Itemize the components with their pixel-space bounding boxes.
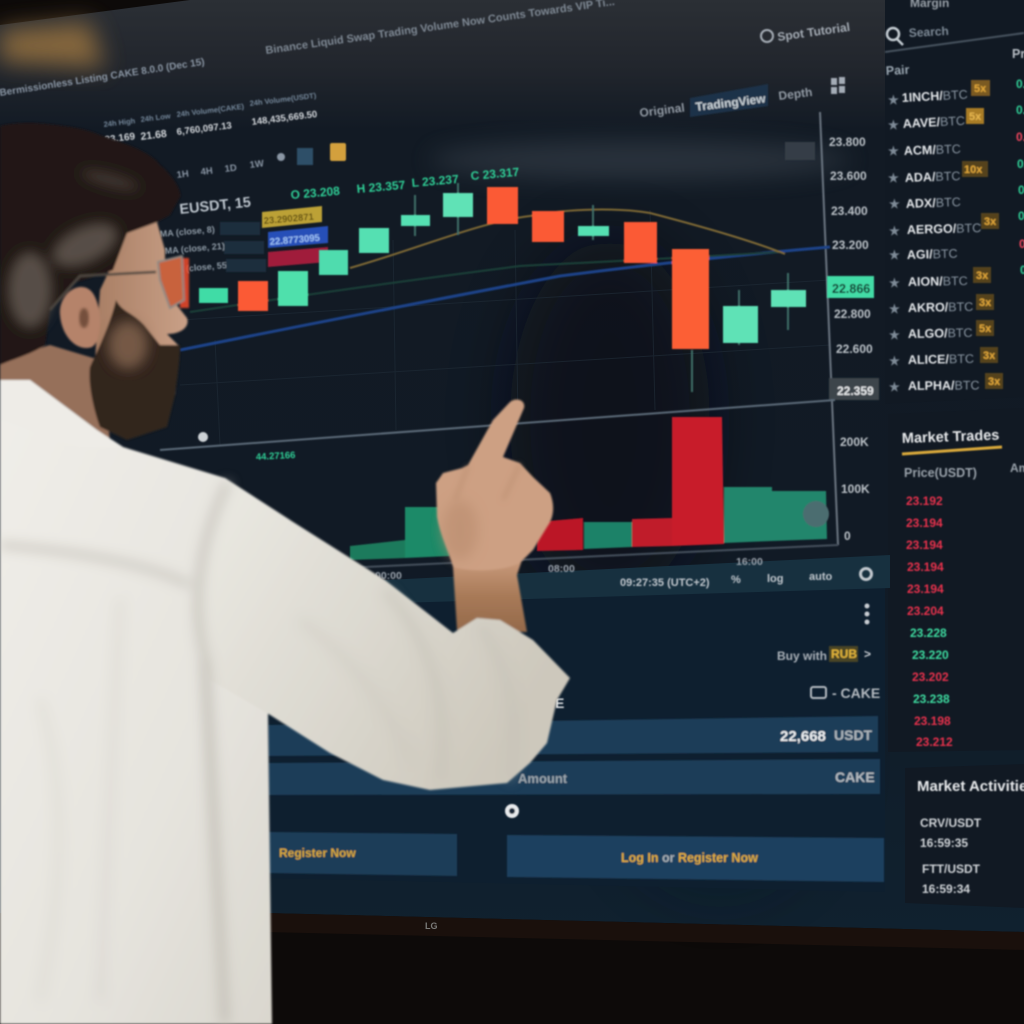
price axis: 200K <box>840 435 869 449</box>
slider handle <box>505 804 519 818</box>
trading pair list: AAVE/BTC <box>902 114 965 131</box>
star markers: ★ <box>889 197 900 211</box>
price axis: 23.800 <box>829 135 866 149</box>
right column panel: pairs <box>885 0 1024 404</box>
trading pair list: 3x <box>983 350 996 362</box>
price axis: 22.800 <box>834 307 871 321</box>
price axis: 100K <box>841 482 870 496</box>
indicator labels and OHLC readout: 23.2902871 <box>263 212 315 227</box>
buy button login: Register Now <box>279 846 356 860</box>
trading pair list: ALPHA/BTC <box>908 378 980 393</box>
trading pair list: AION/BTC <box>908 274 968 289</box>
market trades: 23.238 <box>913 692 950 706</box>
trading pair list: 3x <box>976 270 989 282</box>
market trades: 23.204 <box>907 604 944 618</box>
buy with RUB: > <box>864 647 871 661</box>
hair <box>0 123 180 365</box>
screen reflections <box>0 22 850 890</box>
24h statistics header: 21.68 <box>140 128 168 143</box>
24h statistics header: 24h Low <box>140 111 171 124</box>
timeframe row: 1D <box>224 163 238 175</box>
search box <box>885 0 1024 52</box>
buy with RUB: RUB <box>831 647 857 661</box>
order panel <box>265 578 885 892</box>
trading pair list: ADX/BTC <box>906 195 961 211</box>
chart toolbar strip <box>265 555 890 607</box>
order form <box>268 604 884 882</box>
price axis: 23.400 <box>831 204 868 218</box>
candlestick chart <box>160 183 874 450</box>
ear <box>60 287 100 348</box>
star markers: ★ <box>888 93 899 107</box>
monitor bezel <box>265 913 1024 950</box>
amount input <box>268 759 880 795</box>
trading pair list: 1INCH/BTC <box>901 88 968 105</box>
chart view tabs: Depth <box>778 85 813 103</box>
star markers: ★ <box>889 302 900 316</box>
right column panel: market trades <box>888 408 1024 752</box>
indicator labels and OHLC readout: MA (close, 21) <box>164 241 225 256</box>
market activities: 16:59:34 <box>922 882 970 896</box>
timeframe row: 1H <box>176 169 190 181</box>
form label letter: E <box>555 695 564 711</box>
time axis and toolbar <box>150 545 872 589</box>
market trades: 23.194 <box>907 560 944 574</box>
trading pair list: 3x <box>979 297 992 309</box>
trading pair list: 5x <box>969 111 982 123</box>
market trades: 23.228 <box>910 626 947 640</box>
glasses <box>50 256 189 310</box>
candles <box>199 187 874 349</box>
beard <box>89 300 180 440</box>
star markers: ★ <box>889 224 900 238</box>
star markers: ★ <box>889 354 900 368</box>
price axis: 22.600 <box>836 342 873 356</box>
market trades: 23.192 <box>906 494 943 508</box>
star markers: ★ <box>889 380 900 394</box>
time axis and toolbar: 08:00 <box>548 563 575 575</box>
price input: USDT <box>834 727 873 743</box>
indicator labels and OHLC readout: MA (close, 8) <box>159 224 215 239</box>
trading pair list: AERGO/BTC <box>907 221 981 237</box>
market trades: Market Trades <box>902 428 1000 447</box>
24h statistics header <box>103 91 318 146</box>
star markers: ★ <box>889 248 900 262</box>
trading pair list: ALGO/BTC <box>908 326 973 341</box>
star markers: ★ <box>889 328 900 342</box>
trading pair list: 10x <box>964 164 983 176</box>
trading pair list: ADA/BTC <box>905 169 961 185</box>
time axis and toolbar: log <box>767 573 784 585</box>
price axis <box>785 112 879 545</box>
trading pair list: ALICE/BTC <box>908 352 974 367</box>
CAKE label <box>811 685 880 701</box>
trading pair list <box>885 47 1024 394</box>
star markers: ★ <box>888 118 899 132</box>
volume bars <box>198 417 829 560</box>
hair highlights <box>8 165 141 328</box>
amount input: Amount <box>518 771 568 786</box>
green candle wicks <box>415 183 788 392</box>
price axis: 0 <box>844 529 851 543</box>
indicator labels and OHLC readout <box>159 165 520 275</box>
market activities: CRV/USDT <box>920 816 982 830</box>
24h statistics header: 148,435,669.50 <box>251 109 318 128</box>
market activities: 16:59:35 <box>920 836 968 850</box>
trading pair list: AKRO/BTC <box>908 300 973 315</box>
price axis: 23.200 <box>832 238 869 252</box>
star markers: ★ <box>889 276 900 290</box>
top notice text: Bermissionless Listing CAKE 8.0.0 (Dec 15) <box>0 57 205 99</box>
sell button login: Log In or Register Now <box>621 851 758 865</box>
trading pair list: Pair <box>885 63 910 78</box>
forearm and hand <box>436 400 553 632</box>
shirt sleeve <box>190 478 570 790</box>
time axis and toolbar: auto <box>809 571 832 583</box>
trading pair list: 5x <box>979 323 992 335</box>
time axis and toolbar: % <box>731 574 741 586</box>
indicator labels and OHLC readout: L 23.237 <box>411 172 460 190</box>
beard highlights <box>108 321 148 369</box>
time axis and toolbar: 09:27:35 (UTC+2) <box>620 577 710 589</box>
buy button login <box>268 832 457 876</box>
candlestick chart: 22.866 <box>832 282 870 296</box>
timeframe row <box>176 143 346 181</box>
market trades: 23.202 <box>912 670 949 684</box>
trading pair list: ACM/BTC <box>904 142 961 158</box>
24h statistics header: 24h Volume(CAKE) <box>176 102 245 119</box>
market activities: FTT/USDT <box>922 862 981 876</box>
market trades: 23.198 <box>914 714 951 728</box>
price input <box>268 716 878 756</box>
layout icon <box>831 77 845 94</box>
indicator labels and OHLC readout: EUSDT, 15 <box>179 195 252 218</box>
24h statistics header: 6,760,097.13 <box>176 120 232 138</box>
indicator labels and OHLC readout: O 23.208 <box>290 184 341 202</box>
market trades <box>902 428 1024 749</box>
right column panel: market activities <box>905 764 1024 908</box>
indicator labels and OHLC readout: MA (close, 55) <box>169 260 230 275</box>
moving average lines <box>160 210 835 450</box>
indicator labels and OHLC readout: C 23.317 <box>470 165 520 183</box>
market trades: Price(USDT) <box>904 466 977 480</box>
time axis and toolbar: 00:00 <box>375 570 402 582</box>
chart grid <box>180 210 830 445</box>
star markers: ★ <box>888 144 899 158</box>
shirt torso <box>0 380 300 1024</box>
chart view tabs: Original <box>639 101 685 120</box>
amount input: CAKE <box>835 769 875 785</box>
volume bars: 44.27166 <box>256 450 296 463</box>
timeframe row: 4H <box>200 166 214 178</box>
trading pair list: 3x <box>988 376 1001 388</box>
star markers: ★ <box>888 171 899 185</box>
buy with RUB <box>777 646 871 663</box>
market trades: 23.194 <box>906 516 943 530</box>
top notice text <box>0 0 851 99</box>
man <box>0 123 570 1024</box>
indicator labels and OHLC readout: H 23.357 <box>356 178 406 196</box>
menu dots <box>864 604 870 624</box>
top notice text: Spot Tutorial <box>776 20 851 44</box>
CAKE label: - CAKE <box>832 685 880 701</box>
shirt folds <box>0 482 514 1024</box>
neck <box>0 345 110 440</box>
price column fragments <box>1016 77 1024 277</box>
price axis: 22.359 <box>837 384 874 398</box>
trading pair list: 3x <box>984 216 997 228</box>
indicator labels and OHLC readout: 22.8773095 <box>269 233 321 248</box>
search box: Search <box>908 24 949 40</box>
chart view tabs: TradingView <box>695 91 767 114</box>
24h statistics header: 24h High <box>103 116 136 129</box>
market trades: 23.220 <box>912 648 949 662</box>
time axis and toolbar: 16:00 <box>736 556 763 568</box>
chart view tabs <box>639 77 845 120</box>
collar <box>0 380 123 447</box>
market trades: 23.212 <box>916 735 953 749</box>
price input: 22,668 <box>780 728 826 745</box>
buy with RUB: Buy with <box>777 649 827 663</box>
timeframe row: 1W <box>249 158 265 171</box>
trading pair list: AGI/BTC <box>907 247 958 262</box>
star markers <box>888 93 900 394</box>
price axis: 23.600 <box>830 169 867 183</box>
24h statistics header: 24h Volume(USDT) <box>249 91 317 108</box>
market trades: 23.194 <box>907 582 944 596</box>
monitor bezel: LG <box>425 921 438 931</box>
trading pair list: 5x <box>974 83 987 95</box>
sell button login <box>507 835 884 882</box>
market activities <box>917 778 1024 896</box>
24h statistics header: 23.169 <box>104 131 136 146</box>
market trades: 23.194 <box>906 538 943 552</box>
face <box>95 222 188 420</box>
